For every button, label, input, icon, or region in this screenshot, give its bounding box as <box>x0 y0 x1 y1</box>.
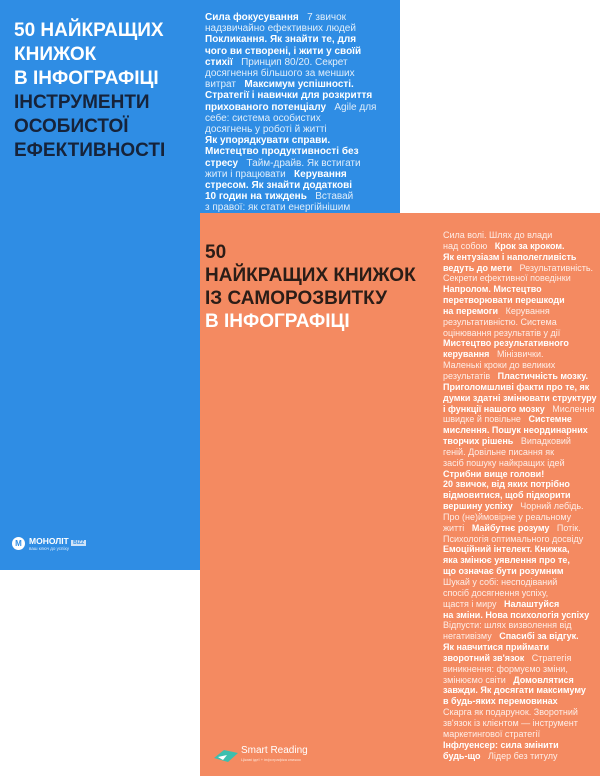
title: orange book: ІЗ САМОРОЗВИТКУ <box>205 288 387 309</box>
text block: blue book titles list: надзвичайно ефективних людей <box>205 23 356 34</box>
text block: orange book titles list: над собою Крок за кроком. <box>443 241 565 251</box>
logo: Моноліт: МОНОЛІТ BIZZ <box>29 536 84 546</box>
text block: orange book titles list: Емоційний інтелект. Книжка, <box>443 544 570 554</box>
text block: blue book titles list: стресом. Як знайти додаткові <box>205 180 352 191</box>
text block: orange book titles list: негативізму Спасибі за відгук. <box>443 631 579 641</box>
text block: blue book titles list: Покликання. Як знайти те, для <box>205 34 356 45</box>
text block: orange book titles list: щастя і миру Налаштуйся <box>443 599 559 609</box>
text block: orange book titles list: Мистецтво результативного <box>443 338 569 348</box>
panel: blue book cover <box>0 0 400 570</box>
text block: orange book titles list: відмовитися, щоб підкорити <box>443 490 571 500</box>
text block: blue book titles list: прихованого потенціалу Agile для <box>205 102 376 113</box>
logo: Smart Reading <box>214 745 308 762</box>
text block: blue book titles list: 10 годин на тиждень Вставай <box>205 191 353 202</box>
text block: blue book titles list: Як упорядкувати справи. <box>205 135 330 146</box>
title: blue book: КНИЖОК <box>14 44 96 65</box>
logo: Smart Reading: Цікаві ідеї + інфографіка книжок <box>241 757 301 762</box>
text block: orange book titles list: Інфлуенсер: сила змінити <box>443 740 559 750</box>
text block: blue book titles list: досягнень у роботі й житті <box>205 124 327 135</box>
icon: teal paper plane <box>214 750 238 762</box>
text block: orange book titles list: виникнення: формуємо зміни, <box>443 664 568 674</box>
text block: orange book titles list: Напролом. Мистецтво <box>443 284 542 294</box>
text block: orange book titles list: житті Майбутнє розуму Потік. <box>443 523 581 533</box>
text block: orange book titles list: оцінювання результатів у дії <box>443 328 560 338</box>
text block: orange book titles list: Маленькі кроки до великих <box>443 360 555 370</box>
text block: orange book titles list: зв'язок із клієнтом — інструмент <box>443 718 578 728</box>
text block: orange book titles list: Як навчитися приймати <box>443 642 549 652</box>
text block: orange book titles list: ведуть до мети Результативність. <box>443 263 593 273</box>
text block: blue book titles list: чого ви створені, і жити у своїй <box>205 46 361 57</box>
title: blue book: 50 НАЙКРАЩИХ <box>14 20 164 41</box>
title: orange book: НАЙКРАЩИХ КНИЖОК <box>205 265 416 286</box>
text block: orange book titles list: Секрети ефективної поведінки <box>443 273 571 283</box>
title: blue book: ОСОБИСТОЇ <box>14 116 129 137</box>
text block: orange book titles list: Скарга як подарунок. Зворотний <box>443 707 578 717</box>
title: blue book: ІНСТРУМЕНТИ <box>14 92 150 113</box>
text block: blue book titles list: стихії Принцип 80/20. Секрет <box>205 57 348 68</box>
text block: orange book titles list: Сила волі. Шлях до влади <box>443 230 552 240</box>
title: orange book: 50 <box>205 242 226 263</box>
text block: blue book titles list: Стратегії і навички для розкриття <box>205 90 372 101</box>
title: blue book: В ІНФОГРАФІЦІ <box>14 68 159 89</box>
text block: blue book titles list: витрат Максимум успішності. <box>205 79 354 90</box>
text block: orange book titles list: перетворювати перешкоди <box>443 295 565 305</box>
text block: blue book titles list: стресу Тайм-драйв. Як встигати <box>205 158 361 169</box>
title: orange book: В ІНФОГРАФІЦІ <box>205 311 350 332</box>
text block: orange book titles list: керування Мінізвички. <box>443 349 544 359</box>
text block: orange book titles list: Відпусти: шлях визволення від <box>443 620 572 630</box>
text block: orange book titles list: на перемоги Керування <box>443 306 550 316</box>
text block: orange book titles list <box>443 230 597 761</box>
text block: orange book titles list: Про (не)ймовірне у реальному <box>443 512 571 522</box>
text block: blue book titles list: Сила фокусування 7 звичок <box>205 12 346 23</box>
logo: Моноліт: М <box>15 539 22 548</box>
text block: orange book titles list: в будь-яких перемовинах <box>443 696 558 706</box>
text block: orange book titles list: Психологія оптимального досвіду <box>443 534 583 544</box>
text block: orange book titles list: на зміни. Нова психологія успіху <box>443 610 589 620</box>
text block: orange book titles list: Як ентузіазм і наполегливість <box>443 252 576 262</box>
panel: orange book cover <box>200 213 600 776</box>
text block: orange book titles list: засіб пошуку найкращих ідей <box>443 458 565 468</box>
text block: blue book titles list <box>205 12 376 213</box>
text block: orange book titles list: результатів Пластичність мозку. <box>443 371 588 381</box>
title: blue book <box>14 18 165 161</box>
text block: blue book titles list: жити і працювати Керування <box>205 169 347 180</box>
title: blue book: ЕФЕКТИВНОСТІ <box>14 140 165 161</box>
text block: orange book titles list: Стрибни вище голови! <box>443 469 544 479</box>
text block: orange book titles list: спосіб досягнення успіху, <box>443 588 548 598</box>
text block: orange book titles list: 20 звичок, від яких потрібно <box>443 479 570 489</box>
text block: blue book titles list: Мистецтво продуктивності без <box>205 146 359 157</box>
text block: orange book titles list: Шукай у собі: несподіваний <box>443 577 557 587</box>
text block: orange book titles list: і функції нашого мозку Мислення <box>443 404 594 414</box>
text block: orange book titles list: геній. Довільне писання як <box>443 447 554 457</box>
text block: orange book titles list: маркетингової стратегії <box>443 729 540 739</box>
text block: orange book titles list: мислення. Пошук неординарних <box>443 425 588 435</box>
text block: blue book titles list: з правої: як стати енергійнішим <box>205 202 350 213</box>
logo: Smart Reading: Smart Reading <box>241 745 308 756</box>
text block: orange book titles list: творчих рішень Випадковий <box>443 436 571 446</box>
logo: Моноліт <box>12 536 86 551</box>
text block: orange book titles list: швидке й повільне Системне <box>443 414 572 424</box>
text block: orange book titles list: Приголомшливі факти про те, як <box>443 382 589 392</box>
text block: orange book titles list: будь-що Лідер без титулу <box>443 750 558 760</box>
text block: orange book titles list: думки здатні змінювати структуру <box>443 393 597 403</box>
text block: orange book titles list: завжди. Як досягати максимуму <box>443 685 586 695</box>
text block: blue book titles list: себе: система особистих <box>205 113 321 124</box>
text block: orange book titles list: вершину успіху Чорний лебідь. <box>443 501 584 511</box>
logo: Моноліт: ваш ключ до успіху <box>29 546 69 551</box>
text block: orange book titles list: яка змінює уявлення про те, <box>443 555 570 565</box>
text block: orange book titles list: змінюємо світи Домовлятися <box>443 675 574 685</box>
text block: blue book titles list: досягнення більшого за менших <box>205 68 355 79</box>
text block: orange book titles list: результативністю. Система <box>443 317 557 327</box>
title: orange book <box>205 242 416 332</box>
text block: orange book titles list: що означає бути розумним <box>443 566 564 576</box>
text block: orange book titles list: зворотний зв'язок Стратегія <box>443 653 571 663</box>
